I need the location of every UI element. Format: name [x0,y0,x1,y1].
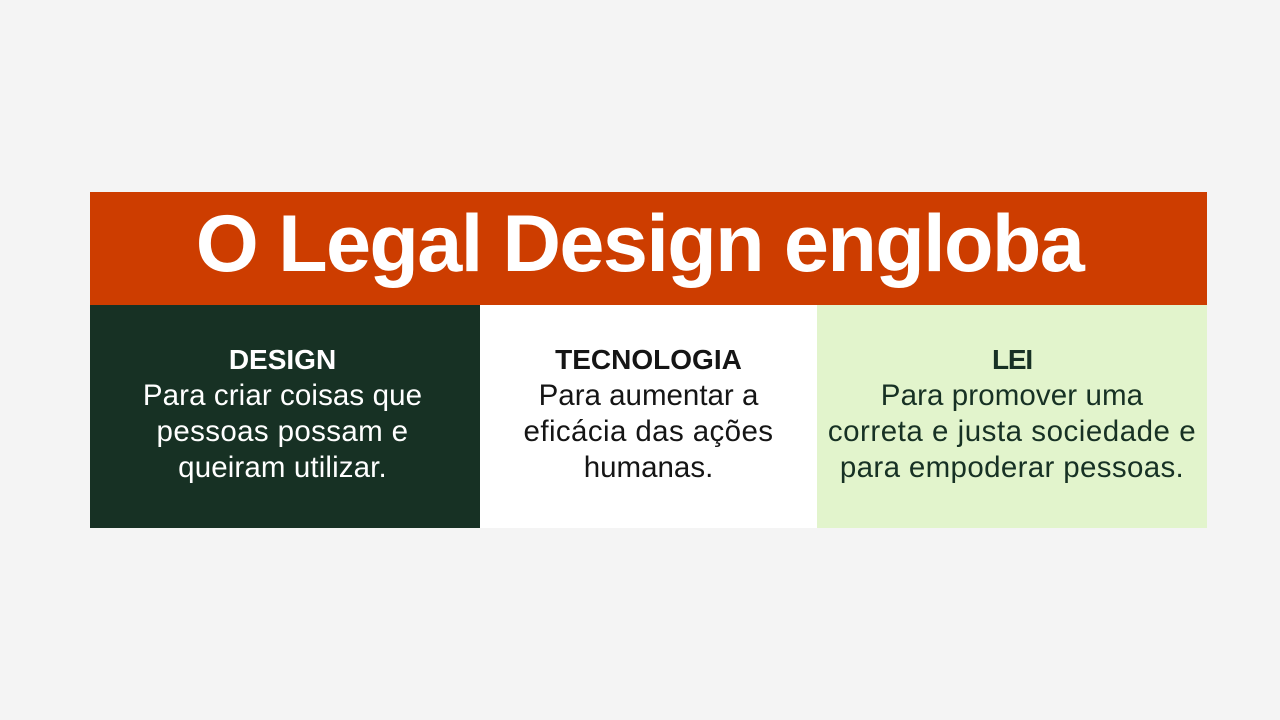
lei text: para empoderar pessoas. [840,451,1184,484]
lei text: correta e justa sociedade e [828,415,1196,448]
panel: design [90,305,480,528]
title banner [90,192,1207,305]
tecnologia text [524,344,773,484]
panel: lei [817,305,1207,528]
tecnologia text: TECNOLOGIA [555,344,742,375]
lei text [828,344,1196,484]
design text [143,344,422,484]
design text: Para criar coisas que [143,379,422,412]
design text: queiram utilizar. [178,451,387,484]
tecnologia text: eficácia das ações [524,415,773,448]
lei text: LEI [992,344,1032,375]
panel: tecnologia [480,305,817,528]
tecnologia text: Para aumentar a [539,379,758,412]
tecnologia text: humanas. [584,451,713,484]
title: O Legal Design engloba [196,199,1083,289]
design text: pessoas possam e [157,415,408,448]
lei text: Para promover uma [881,379,1143,412]
design text: DESIGN [229,344,336,375]
